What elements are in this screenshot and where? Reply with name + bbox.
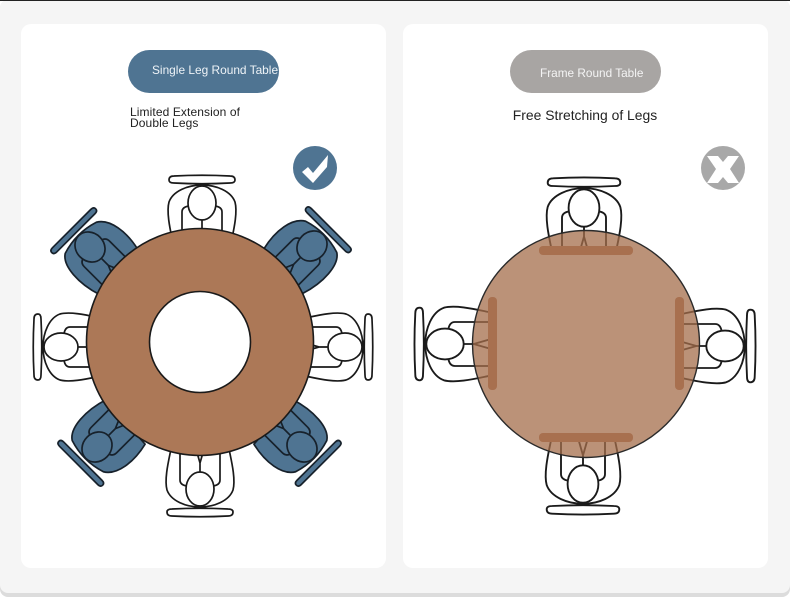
chair: bottom [546, 440, 620, 515]
chair: bottom [166, 449, 234, 517]
chair: left [33, 313, 101, 381]
round table with centre hole [86, 228, 314, 456]
frame legs [488, 246, 684, 442]
chair: top [168, 175, 236, 243]
text: free stretching: Free Stretching of Legs [513, 107, 657, 123]
text: limited extension: Limited Extension of [130, 105, 241, 119]
icon: cross mark [701, 146, 745, 190]
chair: upper left blue [49, 204, 143, 298]
chair: left [414, 307, 489, 381]
chair: right [305, 313, 373, 381]
chair: lower right blue [249, 396, 343, 490]
chair: lower left blue [56, 396, 150, 490]
chair: upper right blue [259, 203, 353, 297]
panel: single leg round table [21, 24, 386, 568]
pill heading: Frame Round Table: Frame Round Table [540, 66, 644, 80]
pill heading: Single Leg Round Table [128, 50, 279, 93]
icon: check mark [293, 146, 337, 190]
pill heading: Frame Round Table [510, 50, 661, 93]
panel: frame round table [403, 24, 768, 568]
text: limited extension: Double Legs [130, 116, 198, 130]
round table top [472, 230, 700, 458]
pill heading: Single Leg Round Table: Single Leg Round Table [152, 63, 278, 77]
chair: top [547, 177, 621, 252]
chair: right [681, 309, 756, 383]
